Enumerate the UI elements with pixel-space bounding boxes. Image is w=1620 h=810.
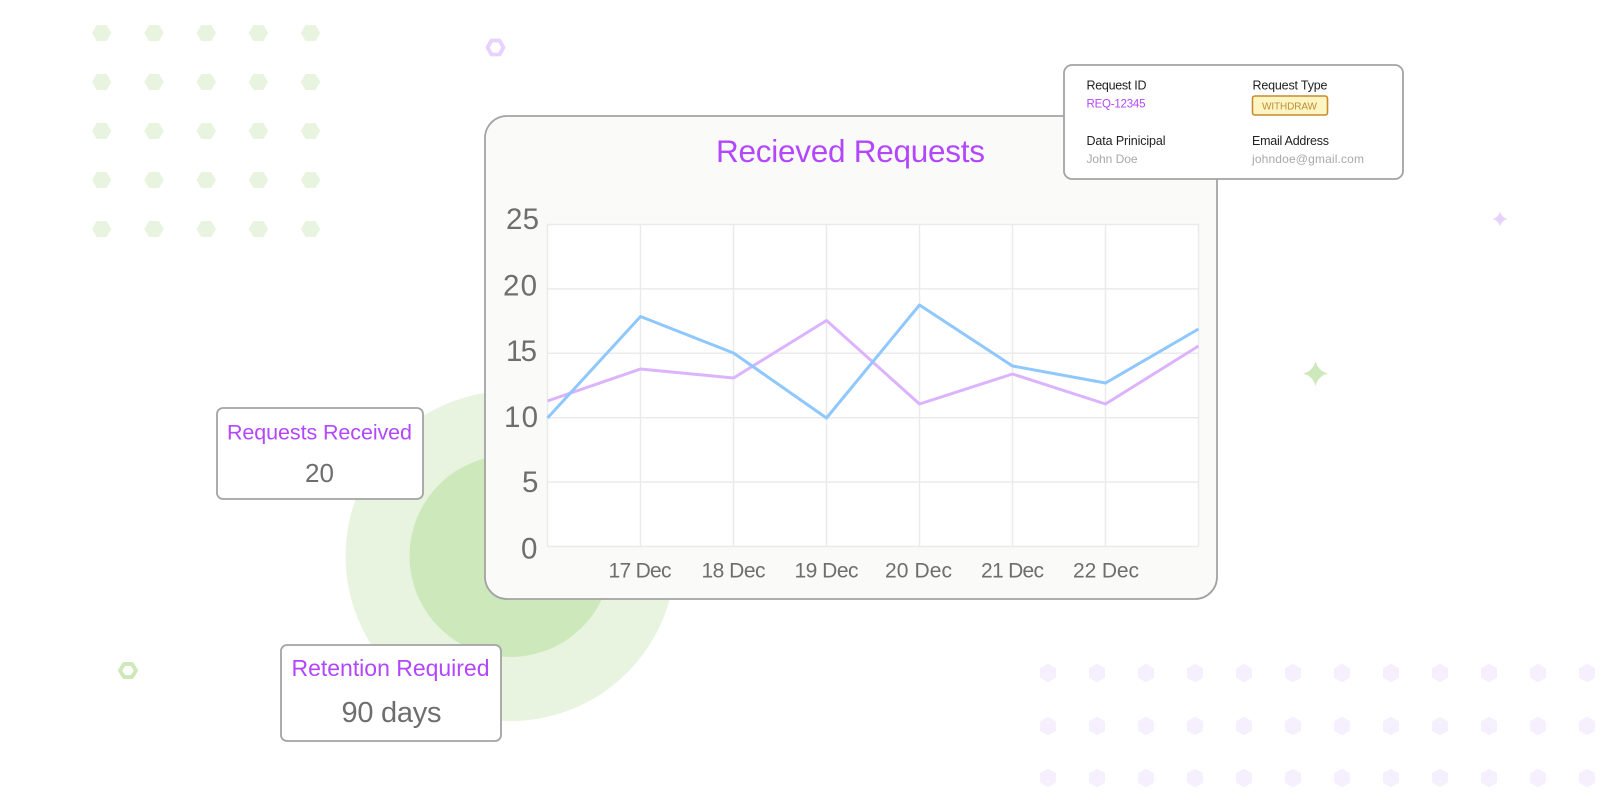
icon: green sparkle xyxy=(1303,361,1328,386)
purple hexagon dot pattern xyxy=(1040,664,1595,787)
y axis labels: 0 xyxy=(521,532,537,566)
x axis labels: 21 Dec xyxy=(981,559,1044,582)
callout: requests received: 20 xyxy=(305,458,334,488)
request id field xyxy=(1086,78,1146,110)
request type field: WITHDRAW xyxy=(1262,102,1318,112)
request type field: Request Type xyxy=(1252,78,1328,92)
icon: hollow purple hexagon xyxy=(488,40,504,54)
y axis labels: 25 xyxy=(506,203,539,236)
panel: received requests chart card xyxy=(485,116,1217,599)
x axis labels: 17 Dec xyxy=(608,559,672,582)
email address field xyxy=(1251,134,1364,166)
concentric green circles xyxy=(346,391,676,721)
email address field: johndoe@gmail.com xyxy=(1251,152,1364,166)
email address field: Email Address xyxy=(1252,134,1329,148)
green hexagon dot pattern xyxy=(92,25,320,237)
callout: retention required: Retention Required xyxy=(292,655,490,681)
panel: request details card xyxy=(1064,65,1403,179)
y axis labels: 10 xyxy=(504,401,538,434)
callout: retention required xyxy=(281,645,501,741)
chart title: Recieved Requests xyxy=(716,133,985,169)
y axis labels xyxy=(503,203,539,566)
icon: hollow green hexagon xyxy=(120,664,136,677)
callout: requests received xyxy=(217,408,423,499)
x axis labels: 18 Dec xyxy=(702,559,766,582)
y axis labels: 5 xyxy=(522,466,538,499)
blue data series xyxy=(548,305,1198,418)
y axis labels: 20 xyxy=(503,270,537,302)
line chart xyxy=(503,203,1198,582)
request id field: Request ID xyxy=(1086,78,1146,92)
y axis labels: 15 xyxy=(506,335,537,368)
x axis labels: 19 Dec xyxy=(794,559,858,582)
x axis labels: 22 Dec xyxy=(1073,559,1139,582)
callout: requests received: Requests Received xyxy=(227,420,412,444)
callout: retention required: 90 days xyxy=(342,697,442,729)
request type field xyxy=(1252,78,1328,115)
data principal field xyxy=(1086,134,1166,166)
icon: purple sparkle xyxy=(1492,212,1508,226)
data principal field: Data Prinicipal xyxy=(1086,134,1166,148)
purple data series xyxy=(548,320,1198,404)
x axis labels: 20 Dec xyxy=(885,559,952,582)
x axis labels xyxy=(608,559,1139,582)
request id field: REQ-12345 xyxy=(1086,98,1146,110)
data principal field: John Doe xyxy=(1086,152,1138,166)
